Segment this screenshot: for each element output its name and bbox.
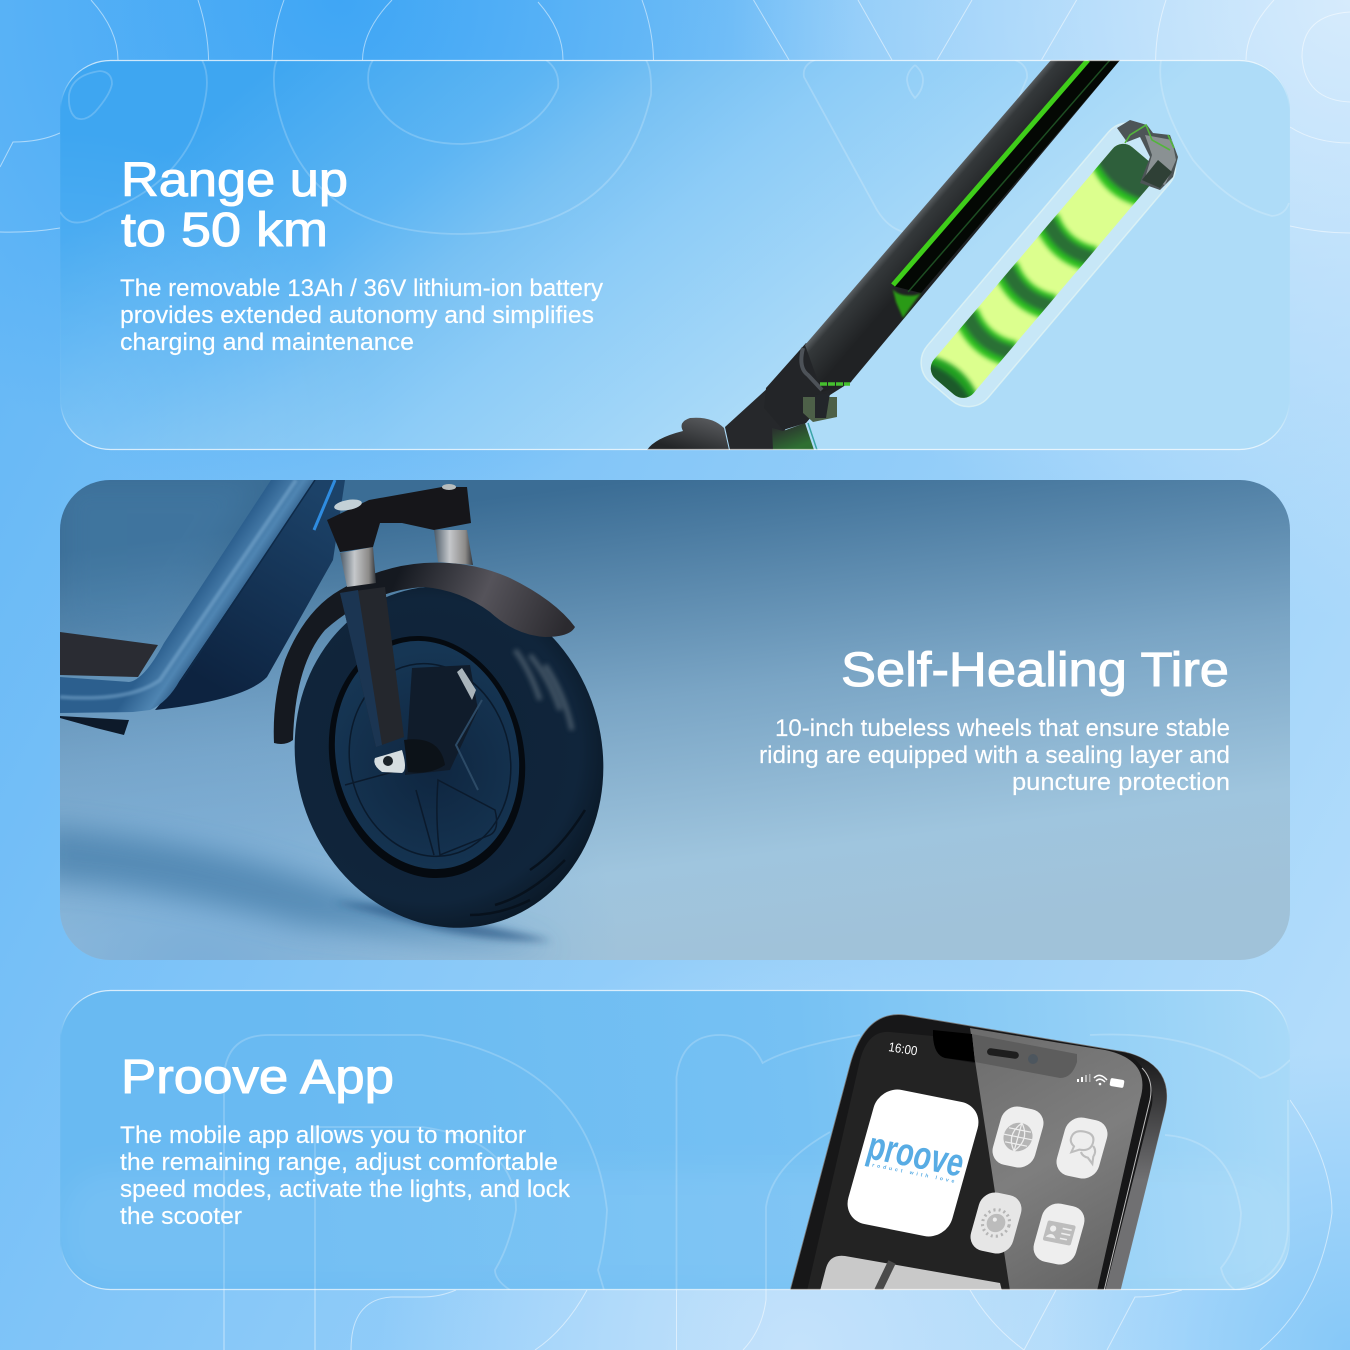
heading: range xyxy=(121,154,348,257)
app widget xyxy=(820,1256,1002,1291)
icon: glowing battery xyxy=(920,120,1178,408)
text block: app description xyxy=(120,1122,571,1230)
speaker xyxy=(987,1048,1019,1059)
heading: range: to 50 km xyxy=(121,204,328,257)
text block: app description: The mobile app allows you to monitor xyxy=(120,1122,526,1149)
status icons xyxy=(1077,1074,1125,1088)
icon: front fork xyxy=(327,484,473,773)
ground shadow xyxy=(40,480,560,950)
icon: scooter deck and frame xyxy=(60,480,345,735)
status time: 16:00 xyxy=(888,1039,919,1058)
app icon: sun xyxy=(970,1192,1022,1254)
app tile: proove xyxy=(848,1090,978,1236)
text block: range description: The removable 13Ah / 36V lithium-ion battery xyxy=(120,275,603,302)
heading: range: Range up xyxy=(121,154,348,207)
panel: range xyxy=(60,60,1290,450)
app icon: contact card xyxy=(1034,1204,1084,1264)
text block: app description: speed modes, activate the lights, and lock xyxy=(120,1176,571,1203)
text block: range description: provides extended autonomy and simplifies xyxy=(120,302,594,329)
text block: range description: charging and maintenance xyxy=(120,329,414,356)
panel: app xyxy=(60,990,1290,1291)
icon: fender xyxy=(274,563,575,744)
text block: tire description: puncture protection xyxy=(1012,769,1230,796)
text block: tire description xyxy=(759,715,1230,796)
text block: tire description: riding are equipped with a sealing layer and xyxy=(759,742,1230,769)
icon: smartphone xyxy=(790,1015,1167,1291)
panel: tire xyxy=(40,480,1290,963)
text block: app description: the scooter xyxy=(120,1203,242,1230)
app tile: proove: proove xyxy=(862,1125,969,1185)
text block: range description xyxy=(120,275,603,356)
app icon: globe xyxy=(992,1106,1044,1168)
app icon: chat xyxy=(1056,1118,1108,1178)
camera xyxy=(1028,1054,1038,1064)
text block: tire description: 10-inch tubeless wheels that ensure stable xyxy=(775,715,1230,742)
heading: tire: Self-Healing Tire xyxy=(841,644,1229,697)
heading: app: Proove App xyxy=(121,1051,394,1104)
icon: scooter stem xyxy=(647,60,1120,450)
text block: app description: the remaining range, adjust comfortable xyxy=(120,1149,558,1176)
app tile: proove: product with love xyxy=(865,1161,955,1185)
icon: wheel xyxy=(294,587,604,928)
